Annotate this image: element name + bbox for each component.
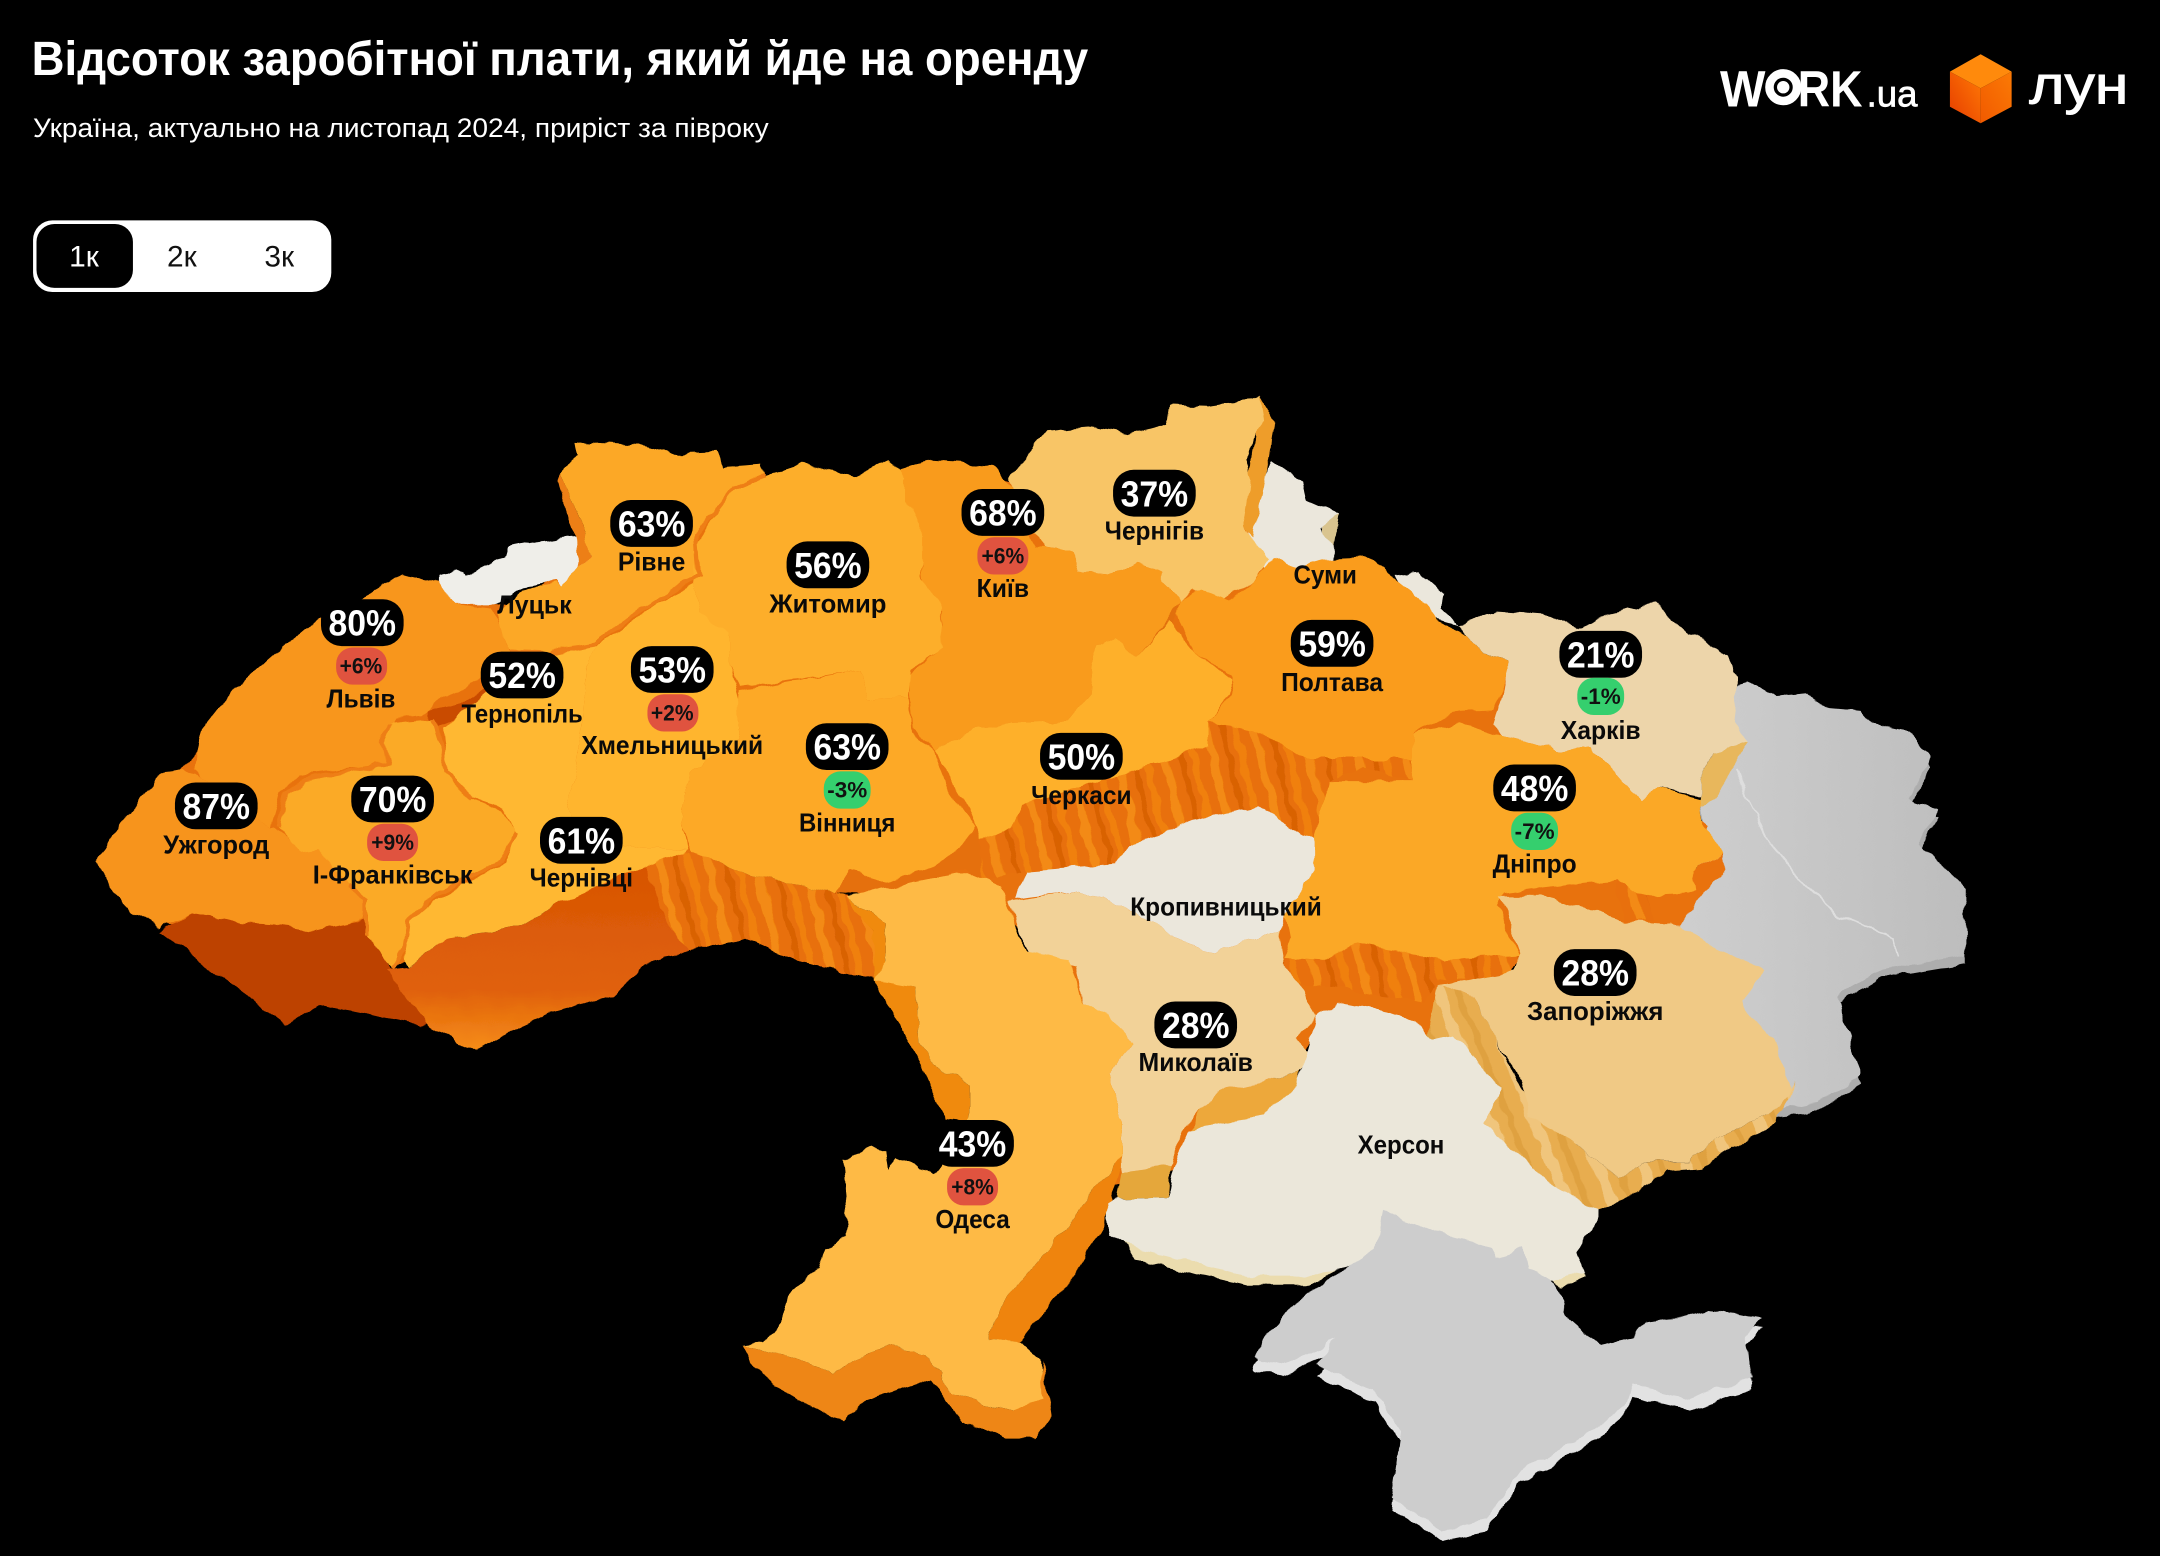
marker: Zaporizhzhia: [1527, 949, 1663, 1026]
marker: Ivano-Frankivsk: 70%: [359, 780, 426, 820]
marker: Dnipro: [1493, 765, 1577, 879]
marker: Vinnytsia: [799, 723, 895, 837]
region: Khmelnytskyi: [568, 585, 740, 849]
label: Kropyvnytskyi: Кропивницький: [1130, 893, 1322, 921]
region: Kyiv: [900, 460, 1181, 762]
marker: Dnipro: Дніпро: [1493, 851, 1577, 879]
region: Lviv: [194, 574, 510, 827]
marker: Odesa: Одеса: [935, 1206, 1011, 1234]
marker: Poltava: 59%: [1298, 624, 1366, 664]
region: Ivano-Frankivsk: [278, 719, 517, 970]
region: Volyn: [439, 534, 590, 603]
subtitle: Україна, актуально на листопад 2024, приріст за півроку: [33, 113, 769, 143]
region: Vinnytsia: [682, 669, 981, 895]
marker: Lviv: Львів: [326, 685, 395, 713]
marker: Khmelnytskyi: [581, 646, 763, 760]
marker: Chernivtsi: Чернівці: [530, 864, 633, 892]
marker: Rivne: 63%: [618, 505, 685, 545]
marker: Cherkasy: Черкаси: [1031, 782, 1132, 810]
marker: Rivne: Рівне: [618, 548, 685, 576]
marker: Kharkiv: [1559, 631, 1642, 745]
regional borders: [278, 474, 766, 970]
marker: Chernihiv: 37%: [1121, 474, 1188, 514]
marker: Lviv: +6%: [340, 654, 383, 679]
salary toggle: 1k 2k 3k: 2к: [167, 241, 198, 274]
marker: Vinnytsia: -3%: [827, 778, 868, 803]
marker: Chernivtsi: 61%: [548, 821, 615, 861]
region: Zakarpattia side wall: [160, 913, 437, 1025]
marker: Khmelnytskyi: 53%: [638, 651, 706, 691]
region: Odesa: [742, 872, 1131, 1438]
region: Cherkasy: [935, 621, 1412, 882]
region: Zhytomyr: [692, 460, 944, 698]
marker: Zhytomyr: [768, 541, 886, 618]
region: Poltava: [1176, 557, 1507, 759]
marker: Zhytomyr: Житомир: [768, 590, 886, 618]
marker: Kyiv: [962, 489, 1044, 603]
marker: Dnipro: -7%: [1515, 819, 1555, 844]
marker: Kharkiv: 21%: [1567, 635, 1634, 675]
region: occupied east (grey): [1653, 681, 1966, 1119]
marker: Zaporizhzhia: Запоріжжя: [1527, 998, 1663, 1026]
marker: Ivano-Frankivsk: [313, 776, 473, 890]
label: Lutsk: Луцьк: [497, 592, 572, 620]
region: Kherson: [1106, 1003, 1598, 1289]
marker: Uzhhorod: Ужгород: [163, 831, 269, 859]
logo: work.ua: RK: [1798, 60, 1863, 117]
marker: Ternopil: Тернопіль: [461, 701, 583, 729]
marker: Kharkiv: -1%: [1581, 684, 1621, 709]
region: Zaporizhzhia: [1427, 895, 1795, 1211]
marker: Cherkasy: [1031, 733, 1132, 810]
marker: Ivano-Frankivsk: І-Франківськ: [313, 862, 473, 890]
logo: work.ua: W: [1720, 60, 1766, 117]
region: Ternopil and Chernivtsi: [402, 646, 689, 968]
region: Chernihiv: [1008, 395, 1274, 599]
marker: Dnipro: 48%: [1501, 769, 1568, 809]
label: Sumy: Суми: [1294, 561, 1357, 589]
logo: lun wordmark: лун: [2029, 55, 2128, 115]
marker: Uzhhorod: 87%: [183, 787, 250, 827]
marker: Vinnytsia: Вінниця: [799, 809, 895, 837]
marker: Ternopil: 52%: [488, 656, 556, 696]
label: Kherson: Херсон: [1358, 1132, 1444, 1160]
marker: Mykolaiv: Миколаїв: [1139, 1049, 1253, 1077]
marker: Rivne: [610, 500, 693, 576]
marker: Kyiv: +6%: [982, 543, 1025, 568]
marker: Odesa: 43%: [939, 1124, 1006, 1164]
marker: Ternopil: [461, 652, 583, 729]
salary toggle: 1k 2k 3k: [33, 220, 331, 292]
region: southwestern side wall: [386, 849, 889, 1051]
marker: Mykolaiv: [1139, 1001, 1253, 1077]
marker: Poltava: [1281, 620, 1384, 697]
logo: work.ua: .ua: [1867, 72, 1918, 114]
region: Kharkiv: [1457, 603, 1749, 806]
marker: Vinnytsia: 63%: [813, 728, 881, 768]
map underlay: region gaps: [103, 475, 1708, 1185]
logo: lun cube: [1950, 54, 2012, 123]
marker: Chernivtsi: [530, 817, 633, 892]
marker: Mykolaiv: 28%: [1162, 1006, 1229, 1046]
region: Mykolaiv: [1008, 890, 1317, 1198]
marker: Uzhhorod: [163, 782, 269, 859]
region: Sumy: [1244, 460, 1457, 625]
region: Kirovohrad: [1015, 806, 1314, 952]
region: Dnipro: [1282, 723, 1725, 1003]
marker: Kharkiv: Харків: [1561, 717, 1641, 745]
marker: Zhytomyr: 56%: [794, 546, 862, 586]
marker: Poltava: Полтава: [1281, 669, 1384, 697]
salary toggle: 1k 2k 3k: 1к: [69, 241, 100, 274]
marker: Chernihiv: Чернігів: [1105, 517, 1204, 545]
salary toggle: 1k 2k 3k: 3к: [264, 241, 295, 274]
marker: Odesa: +8%: [951, 1174, 994, 1199]
marker: Khmelnytskyi: Хмельницький: [581, 732, 763, 760]
marker: Khmelnytskyi: +2%: [651, 700, 694, 725]
marker: Ivano-Frankivsk: +9%: [371, 830, 414, 855]
map: [96, 395, 1966, 1541]
marker: Lviv: 80%: [329, 604, 396, 644]
marker: Cherkasy: 50%: [1048, 737, 1115, 777]
region: Crimea: [1254, 1211, 1762, 1541]
marker: Kyiv: 68%: [969, 494, 1037, 534]
wedge between Lviv and Ternopil: [427, 682, 496, 729]
title: Відсоток заробітної плати, який йде на оренду: [32, 32, 1088, 86]
marker: Odesa: [931, 1120, 1014, 1234]
logo: work.ua: [1720, 60, 1918, 117]
marker: Chernihiv: [1105, 470, 1204, 545]
region: Rivne: [497, 441, 766, 652]
marker: Zaporizhzhia: 28%: [1561, 954, 1629, 994]
marker: Kyiv: Київ: [977, 575, 1029, 603]
region: Zakarpattia: [96, 770, 366, 931]
marker: Lviv: [321, 599, 404, 713]
